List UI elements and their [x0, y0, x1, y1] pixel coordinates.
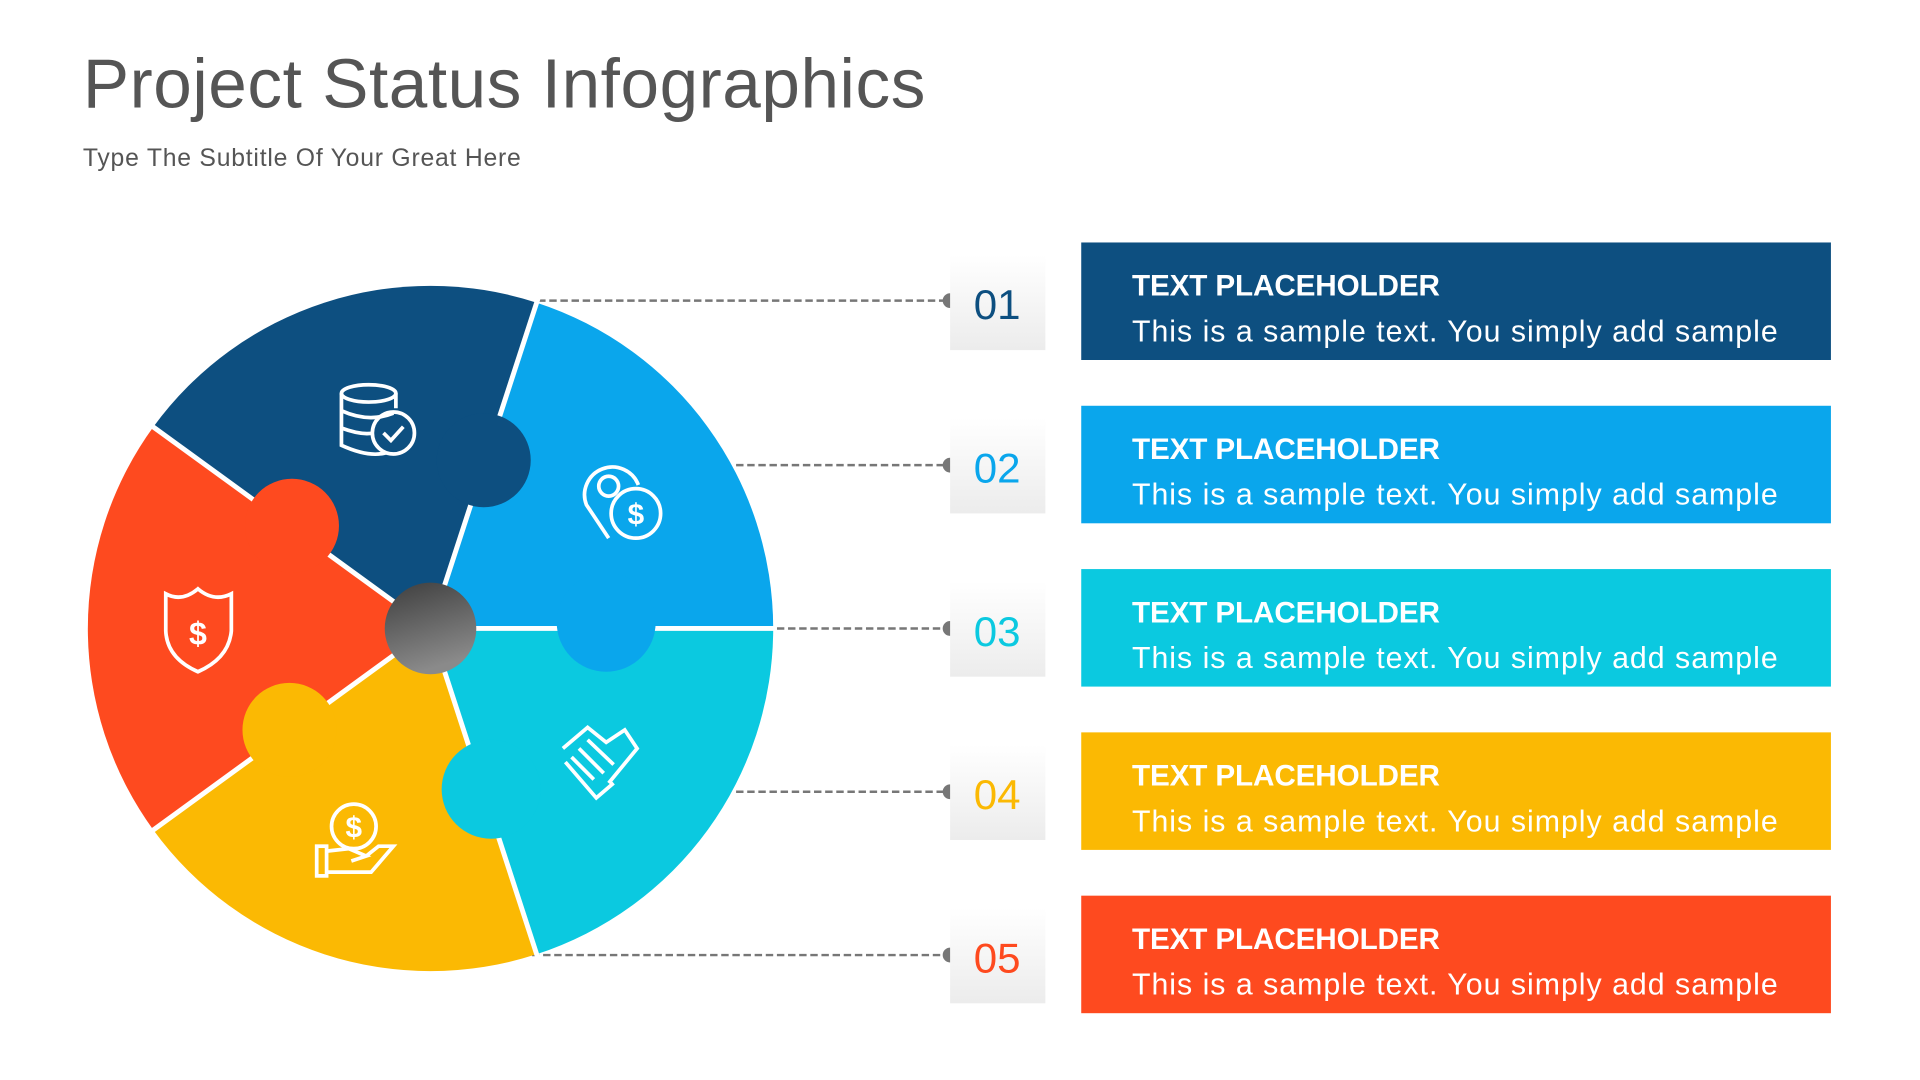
subtitle: Type The Subtitle Of Your Great Here: [83, 145, 521, 172]
piece 3 cyan: [431, 628, 773, 954]
item 2: TEXT PLACEHOLDER: [1132, 433, 1440, 466]
item 2: This is a sample text. You simply add sample: [1132, 479, 1778, 512]
center hub: [385, 583, 476, 674]
dots: [943, 293, 958, 962]
item 4: This is a sample text. You simply add sample: [1132, 805, 1778, 838]
item 3: [950, 569, 1831, 687]
item 1: [950, 242, 1831, 360]
item 1: TEXT PLACEHOLDER: [1132, 270, 1440, 303]
icon: location dollar: [585, 467, 661, 538]
icon: shield dollar: $: [189, 616, 207, 652]
piece 2 blue: [431, 303, 773, 628]
piece 4 yellow: [153, 628, 536, 971]
item 4: TEXT PLACEHOLDER: [1132, 760, 1440, 793]
item 4: 04: [974, 771, 1021, 818]
item 5: [950, 896, 1831, 1013]
item 1: 01: [974, 281, 1021, 328]
item 2: [950, 406, 1831, 523]
item 5: This is a sample text. You simply add sample: [1132, 969, 1778, 1002]
icon: hand coin: [317, 804, 393, 876]
icon: hand coin: $: [346, 812, 363, 845]
icon: handshake: [563, 727, 637, 798]
icon: shield dollar: [166, 589, 231, 672]
icon: location dollar: $: [628, 499, 645, 532]
connector lines: [476, 301, 950, 955]
item 3: TEXT PLACEHOLDER: [1132, 596, 1440, 629]
item 4: [950, 732, 1831, 850]
piece 1 dark blue: [153, 286, 536, 628]
item 2: 02: [974, 444, 1021, 491]
tabs: [437, 413, 531, 507]
item 5: 05: [974, 934, 1021, 981]
item 1: This is a sample text. You simply add sample: [1132, 315, 1778, 348]
item 3: This is a sample text. You simply add sample: [1132, 642, 1778, 675]
piece 5 orange: [88, 427, 431, 830]
item 5: TEXT PLACEHOLDER: [1132, 923, 1440, 956]
puzzle pie chart: [88, 286, 777, 971]
icon: database check: [341, 385, 414, 454]
item 3: 03: [974, 608, 1021, 655]
title: Project Status Infographics: [83, 45, 925, 123]
